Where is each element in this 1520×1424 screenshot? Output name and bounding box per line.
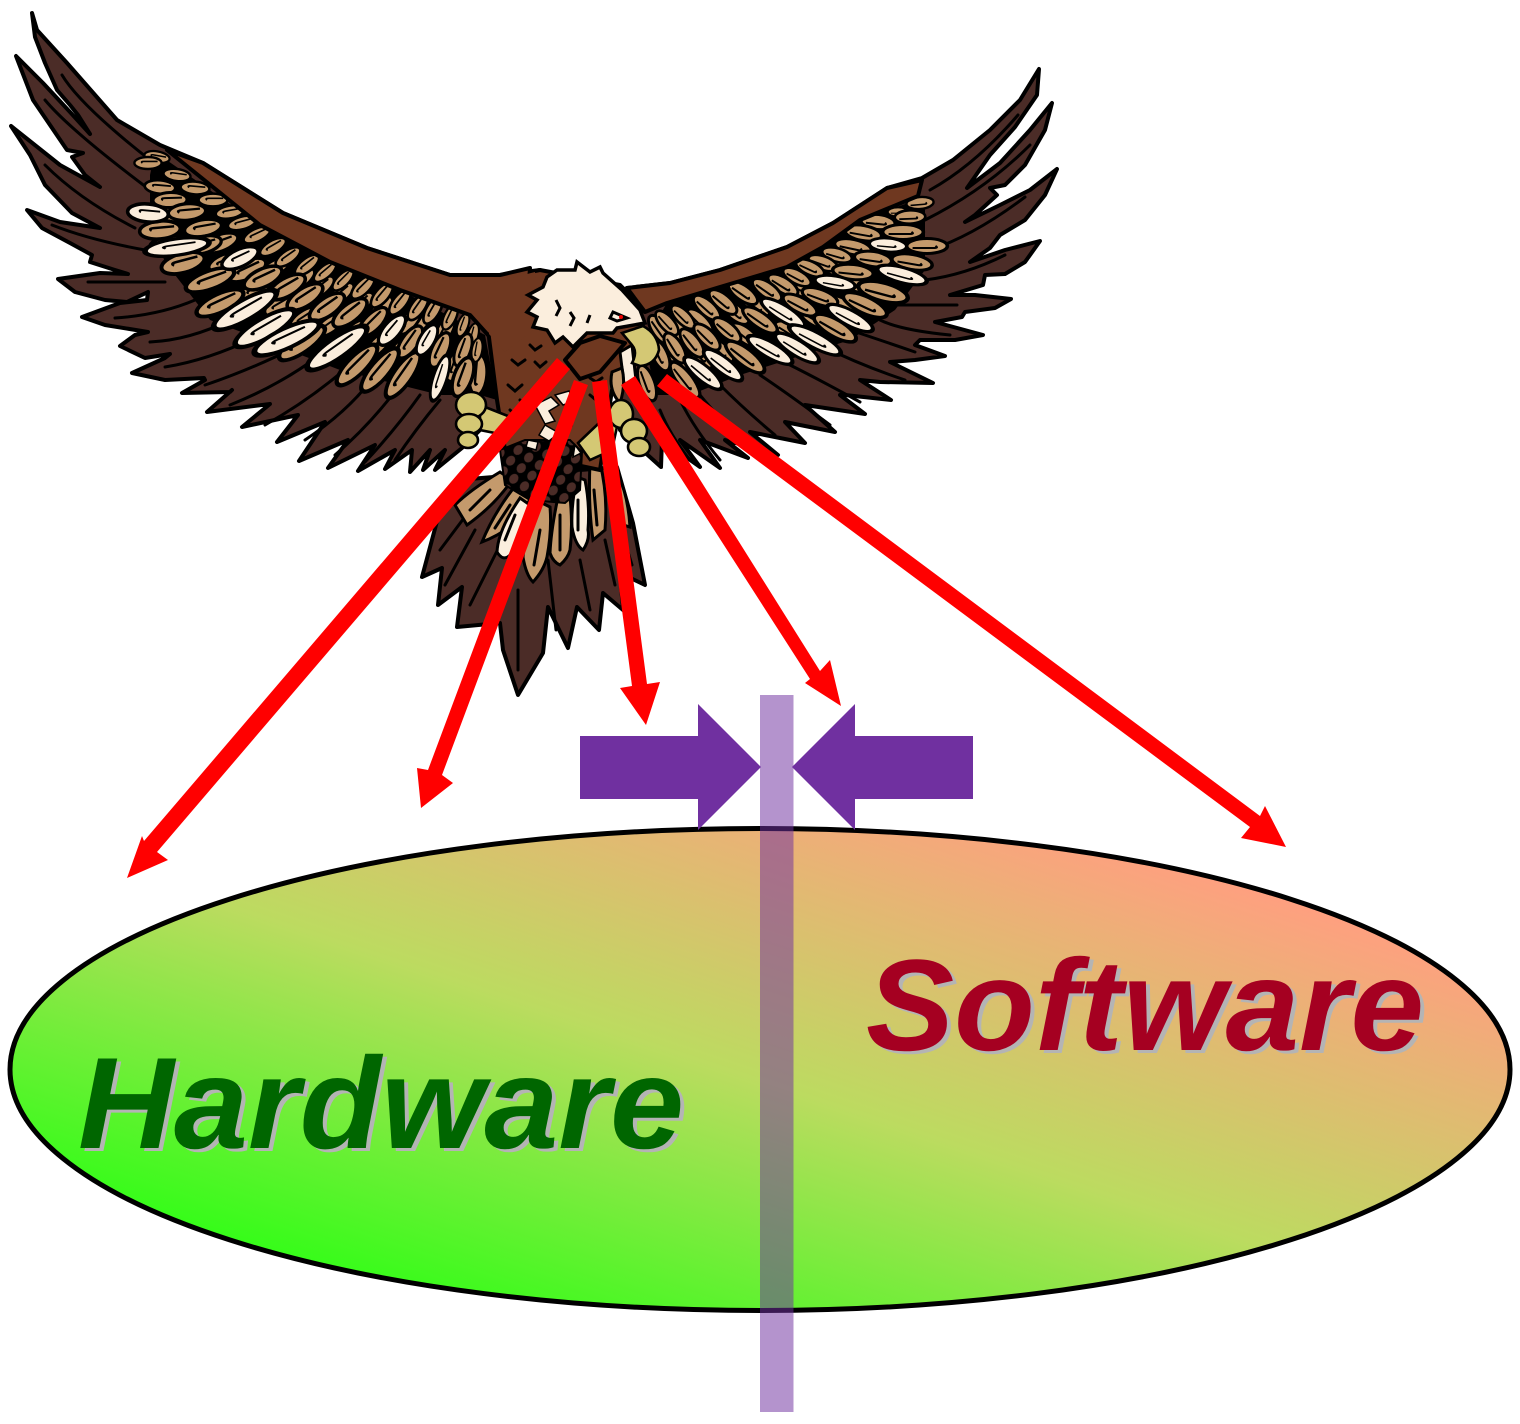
eagle illustration [11,13,1057,695]
arrow: to hardware far [127,358,570,878]
arrow: to interface left [592,380,660,725]
right wing primary feathers [610,69,1057,468]
tail covert feathers [455,463,630,582]
arrow: to hardware near [417,380,588,808]
right wing coverts [634,196,947,403]
arrow: to software [657,374,1286,847]
body [488,270,657,503]
left wing coverts [127,149,497,403]
right talon [578,400,650,460]
head [527,262,645,379]
red arrows from eagle [127,358,1286,878]
arrow: to interface right [621,376,841,706]
label: Hardware: Hardware [78,1030,684,1176]
shoulder join [488,272,540,352]
beak [622,326,659,366]
left wing primary feathers [11,13,540,472]
arrow: purple left [580,704,761,830]
arrow: purple right [792,704,973,830]
left talon [456,392,513,448]
label: Software: Software [866,932,1424,1078]
ellipse: hardware / software space [10,828,1510,1310]
interface bar [760,695,794,1412]
tail feathers [422,467,645,695]
left wing leading edge [167,150,530,335]
right wing leading edge [627,180,922,312]
